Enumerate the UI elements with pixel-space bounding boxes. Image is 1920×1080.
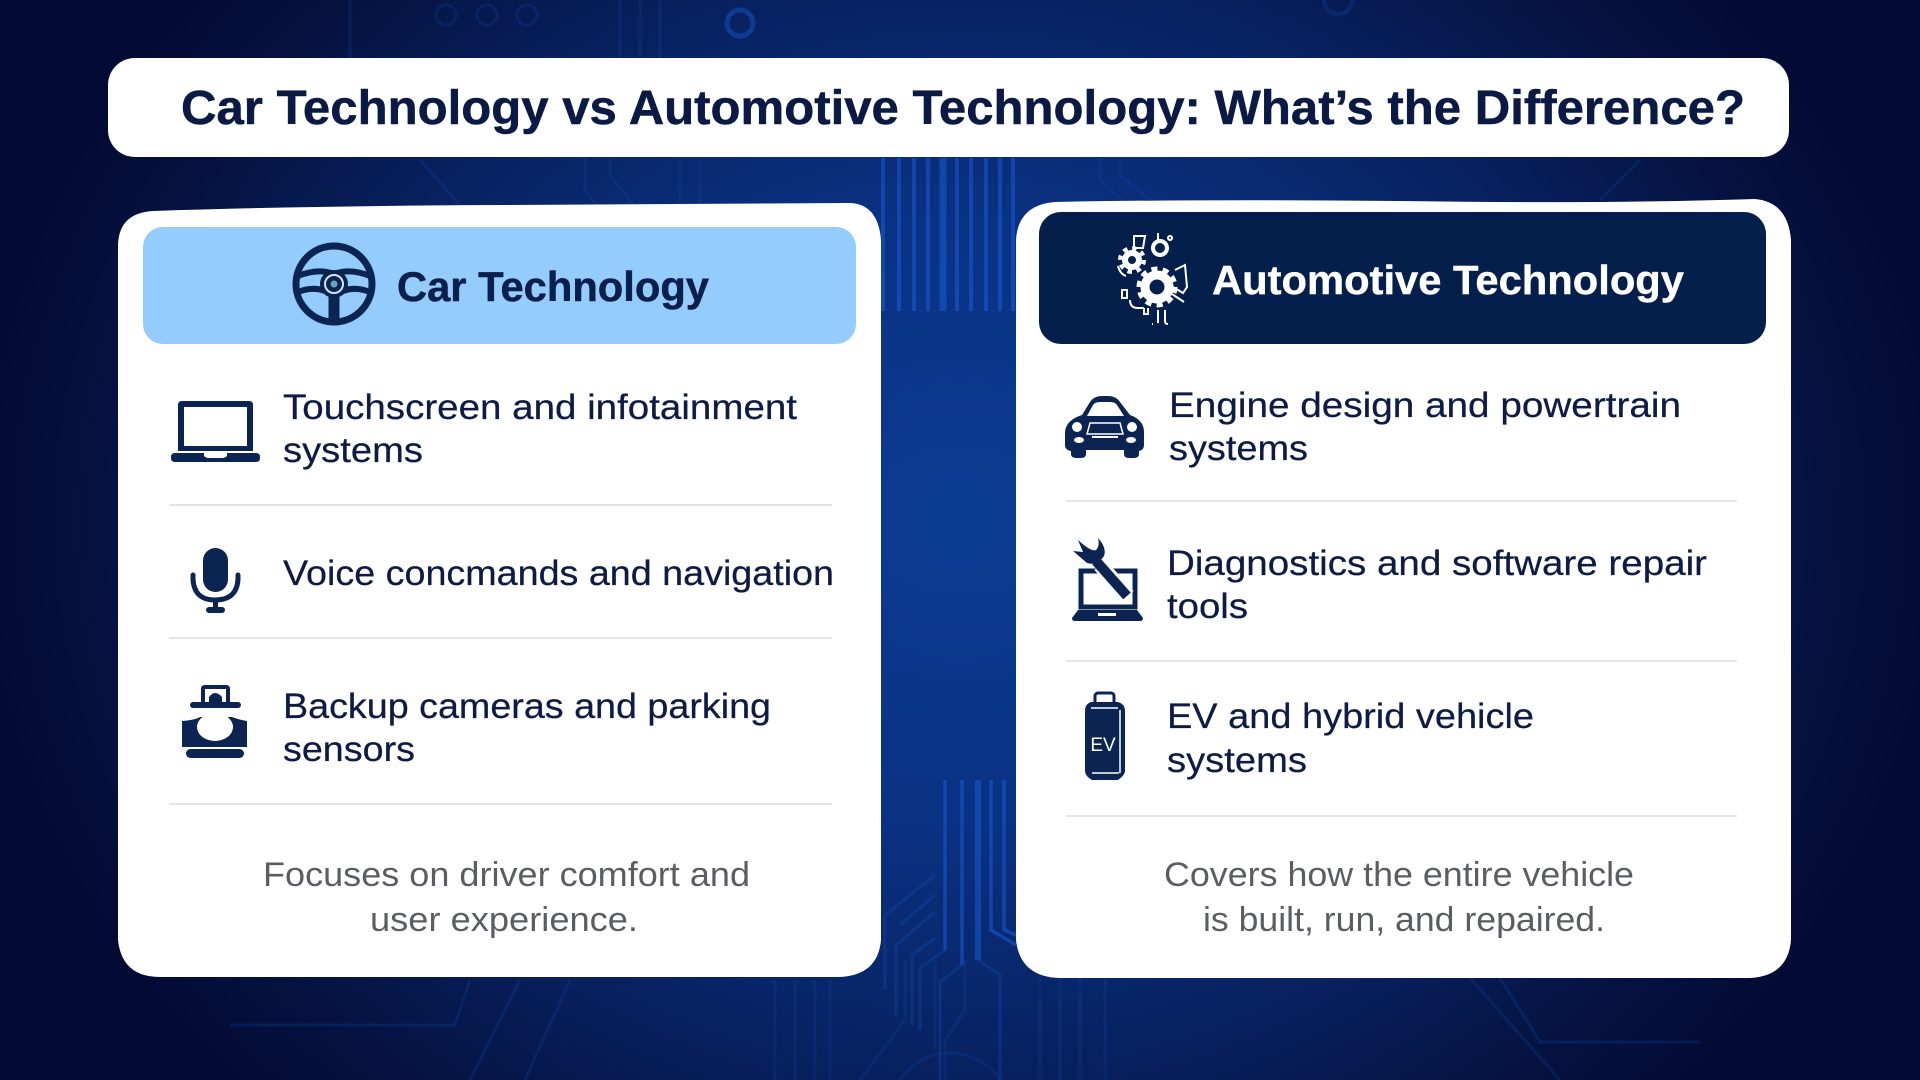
text: diagnostics: Diagnostics and software repair [1167, 544, 1707, 583]
heading: car technology: Car Technology [397, 263, 710, 310]
panel header: automotive technology [1039, 212, 1766, 344]
text: diagnostics: tools [1167, 587, 1248, 626]
text: backup cameras: Backup cameras and parking [283, 687, 771, 726]
icon: car [1065, 396, 1144, 458]
panel: automotive technology [1016, 199, 1791, 978]
icon: gears [1118, 233, 1187, 324]
icon: laptop with wrench [1072, 538, 1143, 621]
text: touchscreen: systems [283, 431, 423, 470]
panel header: car technology [143, 227, 856, 344]
text: EV: systems [1167, 741, 1307, 780]
list item: touchscreen [171, 388, 797, 470]
icon: steering wheel [296, 246, 372, 322]
text: engine: systems [1169, 429, 1308, 468]
caption: car technology: Focuses on driver comfort and [263, 856, 750, 894]
panel: car technology [118, 203, 881, 977]
list item: engine [1065, 386, 1681, 468]
list item: backup cameras [182, 685, 771, 769]
title: Car Technology vs Automotive Technology: What’s the Difference? [181, 82, 1745, 135]
list item: EV [1085, 693, 1534, 780]
title bar [108, 58, 1789, 157]
text: voice: Voice concmands and navigation [283, 554, 834, 593]
text: touchscreen: Touchscreen and infotainment [283, 388, 797, 427]
heading: automotive technology: Automotive Technology [1212, 257, 1684, 303]
icon: laptop [171, 401, 260, 462]
caption: automotive technology: is built, run, and repaired. [1203, 901, 1605, 939]
icon: microphone [193, 548, 238, 613]
icon: backup camera [182, 685, 247, 758]
text: EV: EV and hybrid vehicle [1167, 697, 1534, 736]
text: backup cameras: sensors [283, 730, 415, 769]
icon: EV battery [1085, 693, 1125, 780]
caption: car technology: user experience. [370, 901, 638, 939]
list item: diagnostics [1072, 538, 1707, 626]
list item: voice [193, 548, 834, 613]
text: engine: Engine design and powertrain [1169, 386, 1681, 425]
caption: automotive technology: Covers how the entire vehicle [1164, 856, 1634, 894]
label: EV: EV [1090, 735, 1116, 756]
